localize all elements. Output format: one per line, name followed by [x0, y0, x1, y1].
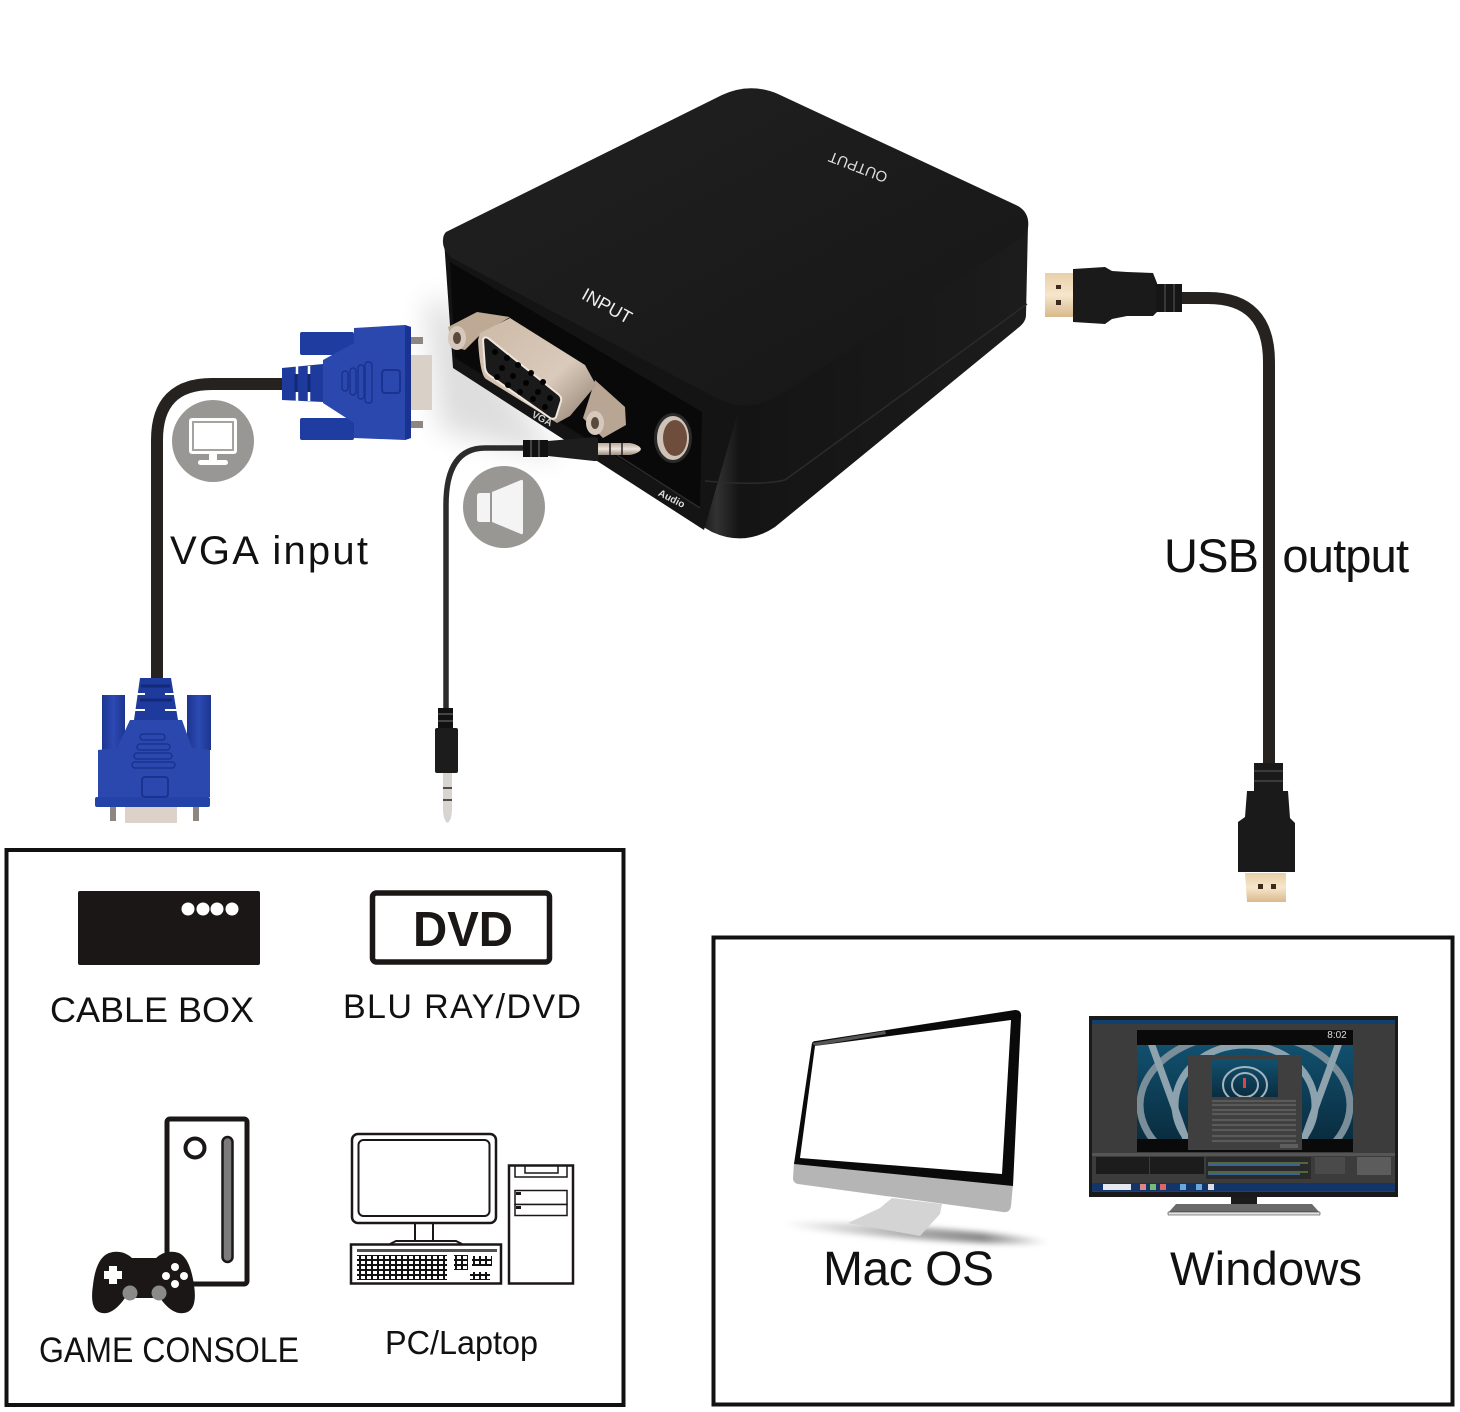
TV stand [1231, 1195, 1257, 1209]
grooves and logo [132, 734, 175, 768]
speaker badge icon [463, 466, 545, 548]
HDMI bottom plug [1238, 763, 1295, 902]
icon: desktop PC [351, 1134, 573, 1284]
stand [848, 1198, 942, 1236]
strain relief [282, 364, 323, 402]
VGA label: VGA [530, 410, 554, 429]
panel: input sources [6, 850, 624, 1405]
panel frame [714, 938, 1452, 1404]
right side face [700, 225, 1028, 538]
icon: cable box [78, 891, 260, 965]
icon: DVD [372, 893, 550, 962]
left side face [444, 240, 740, 530]
connector flange and body [323, 325, 411, 440]
video scene [1137, 1045, 1353, 1139]
Mac OS label: Mac OS [823, 1243, 994, 1296]
moulded body [98, 720, 210, 797]
strain relief [134, 678, 178, 720]
HDMI top plug [1045, 267, 1182, 324]
bezel glare [812, 1031, 886, 1046]
Audio label: Audio [656, 488, 686, 511]
USB output label: USB output [1164, 529, 1409, 582]
vertical audio plug [435, 708, 458, 823]
HDMI cable [1180, 298, 1269, 770]
Windows label: Windows [1170, 1242, 1362, 1295]
VGA input cable [157, 384, 285, 682]
panel frame [6, 850, 624, 1405]
icon: iMac [780, 1010, 1050, 1248]
INPUT label: INPUT [579, 284, 635, 328]
connector screw blocks [300, 332, 354, 355]
top VGA connector [282, 325, 432, 440]
horizontal audio plug [523, 437, 641, 461]
metal shell [478, 318, 596, 423]
seam line [617, 304, 1027, 508]
desktop [1092, 1020, 1395, 1192]
grooves and logo [342, 362, 372, 403]
screw blocks [102, 695, 125, 750]
chin [793, 1162, 1013, 1212]
left mounting flange [448, 312, 510, 350]
connector metal shell [410, 355, 432, 410]
TV bezel [1089, 1016, 1398, 1197]
panel: output targets [714, 938, 1452, 1404]
editor docks [1092, 1153, 1395, 1156]
taskbar [1092, 1183, 1395, 1191]
top face [443, 88, 1028, 406]
bottom VGA connector [95, 678, 211, 823]
PC laptop label: PC/Laptop [385, 1325, 538, 1362]
icon: game console [92, 1119, 247, 1313]
blu ray label: BLU RAY/DVD [343, 988, 581, 1026]
cable box label: CABLE BOX [50, 990, 254, 1030]
icon: Windows TV [1089, 1016, 1398, 1215]
device soft shadow [425, 300, 560, 460]
audio cable [446, 448, 525, 712]
icon: DVD: DVD [413, 903, 513, 957]
audio socket [654, 413, 692, 463]
metal shell [125, 807, 177, 823]
front panel recess [450, 262, 702, 508]
right mounting flange [583, 380, 626, 438]
converter box [443, 88, 1028, 538]
VGA input label: VGA input [170, 529, 368, 573]
connector socket [483, 337, 561, 419]
bezel [794, 1010, 1021, 1186]
OUTPUT label: OUTPUT [826, 148, 890, 186]
video frame [1137, 1030, 1353, 1152]
monitor badge icon [172, 400, 254, 482]
time readout: 8:02 [1327, 1030, 1347, 1041]
dialog window [1188, 1055, 1302, 1150]
VGA port [448, 312, 626, 438]
screen [800, 1020, 1011, 1174]
desk shadow [780, 1218, 1050, 1248]
game console label: GAME CONSOLE [39, 1331, 299, 1370]
